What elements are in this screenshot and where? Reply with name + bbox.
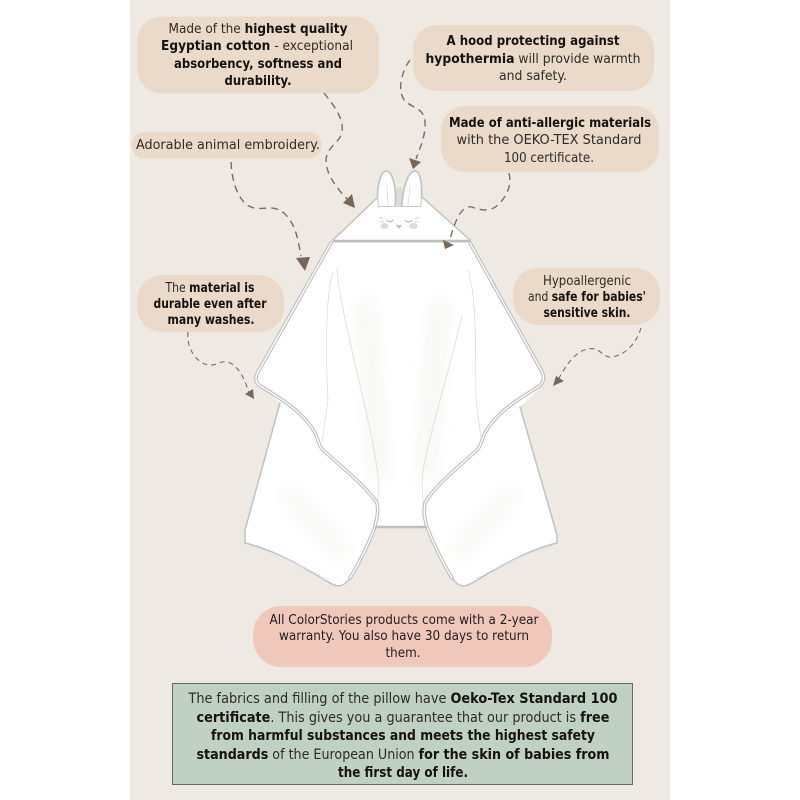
arrow: hood callout to ear (401, 60, 425, 169)
certificate panel: the first day of life. (338, 765, 468, 781)
illustration: white hooded towel with bunny ears (245, 171, 557, 586)
arrow: anti-allergic to hood (443, 173, 510, 249)
callout: durable material: durable even after (154, 297, 267, 312)
callout: hypoallergenic: and safe for babies' (528, 290, 646, 305)
bunny face (379, 217, 419, 229)
callout: durable material: The material is (165, 281, 255, 296)
callout: Egyptian cotton (137, 16, 379, 94)
background panel (130, 0, 670, 800)
callout: hood: hypothermia will provide warmth (426, 52, 640, 67)
callout: Egyptian cotton: absorbency, softness and (174, 57, 342, 72)
callout: anti-allergic: 100 certificate. (504, 151, 594, 166)
callout: hypoallergenic: sensitive skin. (544, 306, 630, 321)
callout: hood: and safety. (499, 69, 567, 84)
callout: warranty: warranty. You also have 30 days to return (279, 629, 529, 644)
certificate panel: certificate. This gives you a guarantee that our product is free (196, 710, 610, 726)
callout: animal embroidery: Adorable animal embroidery. (136, 138, 320, 153)
callout: Egyptian cotton: durability. (224, 74, 292, 89)
certificate panel: The fabrics and filling of the pillow have Oeko-Tex Standard 100 (188, 691, 618, 707)
callout: hypoallergenic: Hypoallergenic (543, 274, 631, 289)
arrow: material to towel (188, 332, 254, 399)
callout: durable material (137, 275, 284, 332)
callout: hood: A hood protecting against (446, 34, 620, 49)
callout: anti-allergic (441, 106, 659, 172)
callout: animal embroidery (132, 132, 322, 158)
arrow: hypoallergenic to towel (553, 328, 641, 386)
callout: hood (413, 25, 654, 91)
certificate panel: standards of the European Union for the skin of babies from (196, 747, 610, 763)
arrow: embroidery to towel (231, 162, 310, 271)
callout: hypoallergenic (513, 268, 660, 325)
callout: warranty (253, 606, 552, 667)
hood with ears and face (333, 171, 471, 241)
callout: Egyptian cotton: Egyptian cotton - exceptional (161, 39, 353, 54)
callout: anti-allergic: with the OEKO-TEX Standard (456, 133, 642, 148)
callout: anti-allergic: Made of anti-allergic materials (449, 116, 651, 131)
towel body (245, 243, 557, 586)
arrow: cotton to hood (324, 93, 355, 208)
callout: warranty: them. (386, 646, 420, 661)
callout: warranty: All ColorStories products come with a 2-year (270, 613, 539, 628)
certificate panel (172, 684, 632, 784)
callout: Egyptian cotton: Made of the highest quality (168, 22, 348, 37)
callout: durable material: many washes. (168, 313, 254, 328)
certificate panel: from harmful substances and meets the highest safety (211, 728, 595, 744)
